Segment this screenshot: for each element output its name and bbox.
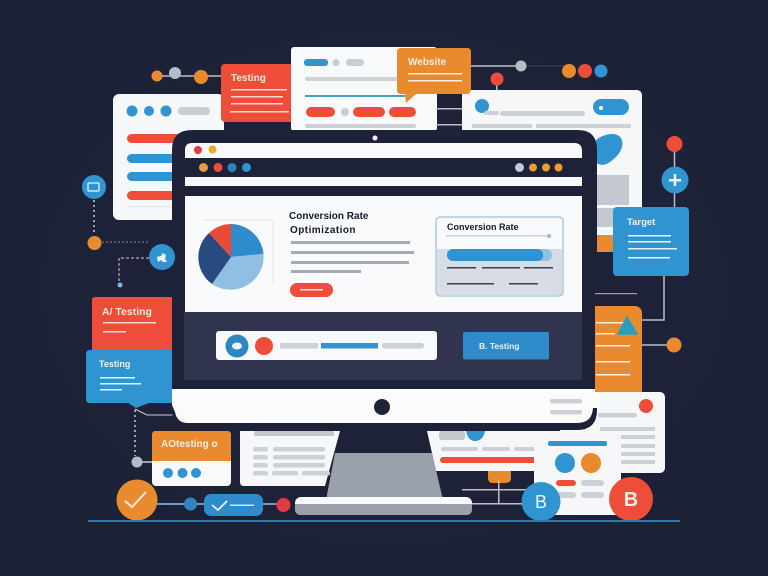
callout: orange Website bubble: Website: [408, 57, 447, 68]
icon: plus circle with red dot: [662, 136, 688, 210]
connector: lower right tree: [462, 471, 526, 504]
panel: blue Target card: [613, 207, 689, 276]
callout: blue Testing bubble: [86, 350, 172, 408]
connector: dotted line to grey dot: [132, 409, 174, 468]
panel: left browser card: [113, 94, 224, 220]
button: A/B testing: B. Testing: [479, 341, 519, 351]
panel: lower centre bar card: [427, 431, 540, 471]
connector: orange list to blue card and dot: [595, 275, 682, 352]
monitor stand: [295, 453, 472, 515]
address bar: [185, 177, 582, 186]
headline: Conversion Rate: [289, 211, 369, 222]
baseline: [88, 520, 680, 522]
callout: orange Website bubble: [397, 48, 471, 103]
white status bar: [216, 331, 437, 360]
panel: red Testing card: [221, 64, 295, 122]
panel: blue Target card: Target: [627, 217, 656, 228]
call to action button: [290, 283, 333, 297]
connector: top left dots: [152, 67, 222, 84]
panel: lower left list card: [240, 431, 340, 486]
monitor chin: [172, 389, 600, 423]
icon: red B badge: [609, 477, 653, 521]
pill: blue check label: [184, 494, 290, 516]
monitor: [172, 130, 600, 430]
connector: link lines between cards: [436, 72, 504, 126]
panel: small A/B card: [534, 431, 621, 515]
lower screen band: [184, 312, 582, 380]
icon: orange check badge: [116, 480, 284, 520]
headline: Optimization: [290, 225, 356, 236]
icon: blue B badge: B: [535, 492, 547, 512]
icon: blue blob: [594, 134, 622, 165]
panel: right browser card: [462, 90, 642, 252]
screen content: [185, 196, 582, 312]
conversion rate panel: Conversion Rate: [447, 222, 519, 232]
panel: red A/B Testing card: A/ Testing: [102, 306, 152, 318]
panel: orange A/B testing card: AOtesting o: [161, 439, 218, 450]
icon: red B badge: B: [624, 489, 638, 511]
panel: top page card: [291, 47, 437, 131]
pie chart: [198, 224, 264, 290]
callout: blue Testing bubble: Testing: [99, 359, 130, 369]
conversion rate panel: [436, 217, 563, 296]
browser title bar: [185, 143, 582, 158]
headline: [289, 211, 369, 236]
icon: warning triangle: [618, 317, 637, 334]
panel: lower right white card: [560, 392, 665, 473]
panel: orange A/B testing card: [152, 431, 231, 486]
panel: orange side list: [595, 306, 642, 392]
icon: blue B badge: [522, 482, 560, 521]
icon: left blue circle with dotted connector: [82, 175, 150, 250]
pie chart frame: [203, 220, 273, 285]
panel: red A/B Testing card: [92, 297, 172, 356]
button: A/B testing: [463, 332, 549, 360]
connector: top right dots: [470, 60, 608, 78]
body text: [291, 241, 414, 273]
panel: red Testing card: Testing: [231, 73, 266, 84]
toolbar dots left: [199, 163, 251, 172]
toolbar dots right: [515, 163, 562, 172]
icon: puzzle circle: [118, 244, 175, 288]
